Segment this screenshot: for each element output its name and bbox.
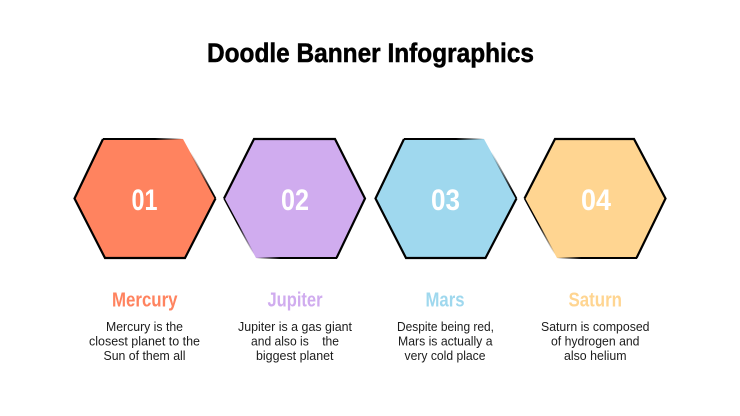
description: Mercury xyxy=(89,320,200,363)
description: Saturn: also helium xyxy=(564,349,626,363)
description: Mars xyxy=(397,320,494,363)
description: Saturn: Saturn is composed xyxy=(541,320,650,334)
title: Doodle Banner Infographics xyxy=(207,38,534,68)
heading: Saturn: Saturn xyxy=(568,290,622,312)
panel: Mercury xyxy=(74,138,216,363)
panel: Mars xyxy=(376,138,516,363)
description: Mars: very cold place xyxy=(404,349,486,363)
description: Mars: Despite being red, xyxy=(397,320,494,334)
description: Mars: Mars is actually a xyxy=(398,334,493,348)
description: Mercury: closest planet to the xyxy=(89,334,200,348)
number 02: 02 xyxy=(281,184,309,217)
description: Saturn: of hydrogen and xyxy=(551,334,640,348)
description: Jupiter: biggest planet xyxy=(256,349,334,363)
number 01: 01 xyxy=(132,184,158,217)
description: Saturn xyxy=(541,320,650,363)
number 04: 04 xyxy=(581,184,611,217)
icon: blue hexagon xyxy=(376,138,516,258)
icon: purple hexagon xyxy=(224,139,365,259)
description: Mercury: Sun of them all xyxy=(104,349,186,363)
icon: orange hexagon xyxy=(74,138,216,258)
heading: Mercury: Mercury xyxy=(112,290,178,312)
number 03: 03 xyxy=(431,184,460,217)
description: Jupiter xyxy=(238,320,353,363)
description: Jupiter: and also is the xyxy=(251,334,339,348)
heading: Jupiter: Jupiter xyxy=(268,290,323,312)
icon: yellow hexagon xyxy=(524,139,666,259)
panel: Saturn xyxy=(524,139,666,363)
description: Mercury: Mercury is the xyxy=(106,320,183,334)
description: Jupiter: Jupiter is a gas giant xyxy=(238,320,353,334)
panel: Jupiter xyxy=(224,139,365,363)
heading: Mars: Mars xyxy=(426,290,464,312)
